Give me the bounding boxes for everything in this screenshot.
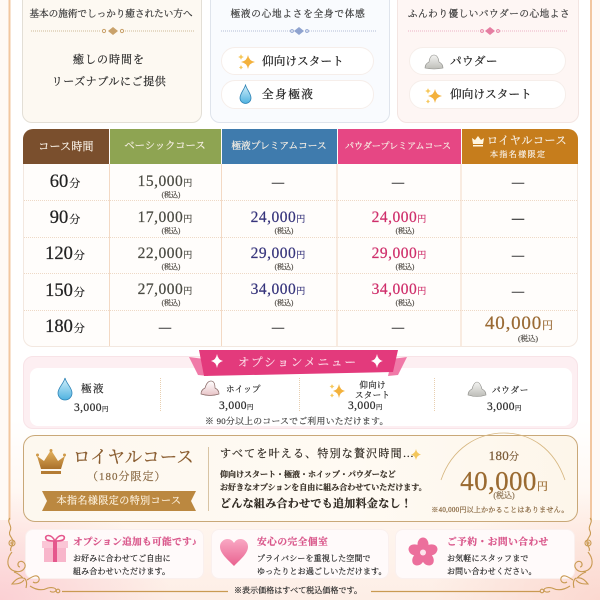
price: 34,000: 34,000円 <box>251 281 305 298</box>
ribbon: option menu heading <box>189 350 407 376</box>
description: お好みに合わせてご自由に <box>73 554 171 563</box>
price: 34,000: 34,000円 <box>372 281 426 298</box>
royal price block <box>430 447 576 517</box>
option name: パウダー <box>492 385 529 395</box>
royal highlight: どんな組み合わせでも追加料金なし！ <box>220 498 412 510</box>
tax note: (税込) <box>275 299 293 307</box>
royal price arc <box>430 428 580 498</box>
option price: 3,000円 <box>487 401 522 413</box>
tax note: (税込) <box>396 263 414 271</box>
option name <box>355 380 390 400</box>
panel: gokueki premium card <box>210 0 390 123</box>
tax note: (税込) <box>518 334 538 343</box>
table grid <box>24 164 577 346</box>
heading: オプション追加も可能です♪ <box>73 537 197 548</box>
icon: crown <box>36 449 66 477</box>
icon: water drop <box>58 378 72 400</box>
icon: sparkles <box>330 384 345 398</box>
row: 180 min: 180分 <box>45 317 85 337</box>
heading: 安心の完全個室 <box>257 537 328 548</box>
price: 40,000 royal: 40,000円 <box>485 313 553 334</box>
dash: — <box>512 175 524 189</box>
price: 22,000: 22,000円 <box>138 245 192 262</box>
panel: add options <box>25 529 204 579</box>
row: 60 min: 60分 <box>50 172 80 192</box>
header: powder premium <box>338 129 461 164</box>
ribbon label: オプションメニュー <box>238 357 358 369</box>
dash: — <box>159 320 171 334</box>
price: 29,000: 29,000円 <box>251 245 305 262</box>
royal title: ロイヤルコース <box>73 447 194 467</box>
panel: reservation <box>395 529 575 579</box>
pill label: 全身極液 <box>262 88 314 101</box>
tax note: (税込) <box>162 299 180 307</box>
pill label: パウダー <box>450 55 498 68</box>
header: powder premium: パウダープレミアムコース <box>345 141 451 151</box>
pill: face-up start <box>221 47 374 75</box>
icon: whip mound <box>200 380 220 396</box>
icon: crown <box>472 136 484 146</box>
tax note: (税込) <box>162 263 180 271</box>
ornament divider <box>221 27 376 35</box>
description: お問い合わせください。 <box>447 566 537 576</box>
option: face-up start <box>330 380 390 412</box>
row: 150 min: 150分 <box>45 281 85 301</box>
ornament divider <box>31 27 194 35</box>
inner white area <box>30 368 572 426</box>
option note: ※ 90分以上のコースでご利用いただけます。 <box>205 416 389 426</box>
option name: スタート <box>355 390 390 400</box>
royal title: ロイヤルコース <box>487 135 567 147</box>
ornament divider <box>408 27 567 35</box>
option name: ホイップ <box>226 384 261 394</box>
description: お気軽にスタッフまで <box>447 554 528 563</box>
duration: 180分 <box>489 448 519 463</box>
option price: 3,000円 <box>219 400 254 412</box>
dash: — <box>512 211 524 225</box>
pill: full body gokueki <box>221 80 374 109</box>
icon: sparkle <box>409 448 422 461</box>
option name: 仰向け <box>359 380 386 390</box>
option name: 極液 <box>81 384 105 395</box>
price: 24,000: 24,000円 <box>372 209 426 226</box>
option: whip <box>200 380 261 412</box>
icon: cherry blossom <box>408 537 438 568</box>
price: 15,000: 15,000円 <box>138 173 192 190</box>
footer note: ※表示価格はすべて税込価格です。 <box>234 586 362 595</box>
tax note: (税込) <box>162 191 180 199</box>
row: 90 min: 90分 <box>50 208 80 228</box>
tax note: (税込) <box>396 227 414 235</box>
icon: water drop <box>240 84 252 104</box>
icon: powder mound <box>424 54 444 70</box>
header: gokueki premium <box>222 129 337 164</box>
heading: ご予約・お問い合わせ <box>447 537 549 548</box>
description: プライバシーを重視した空間で <box>257 554 371 563</box>
header: basic course <box>110 129 221 164</box>
tax note: (税込) <box>162 227 180 235</box>
header: course time <box>23 129 109 164</box>
description <box>73 553 171 578</box>
panel: royal course <box>23 435 578 522</box>
gold corner flourishes and footer rules <box>0 510 600 600</box>
option: powder <box>468 382 529 413</box>
price cap note: ※40,000円以上かかることはありません。 <box>431 506 569 514</box>
option: gokueki <box>58 378 109 414</box>
royal description: 仰向けスタート・極液・ホイップ・パウダーなど <box>220 470 396 479</box>
pill: face-up start <box>409 80 566 109</box>
tax note: (税込) <box>275 263 293 271</box>
header: course time: コース時間 <box>38 141 94 153</box>
icon: sparkles <box>238 54 255 70</box>
tax note: (税込) <box>493 491 515 500</box>
dash: — <box>392 175 404 189</box>
price: 29,000: 29,000円 <box>372 245 426 262</box>
royal description <box>220 468 427 494</box>
dash: — <box>392 320 404 334</box>
description: 組み合わせいただけます。 <box>73 566 170 576</box>
row: 120 min: 120分 <box>45 244 85 264</box>
dash: — <box>272 175 284 189</box>
description <box>257 553 387 578</box>
panel: basic course card <box>22 0 202 123</box>
price table <box>23 129 578 347</box>
card text: 癒しの時間を <box>73 54 145 66</box>
panel: option menu <box>23 356 578 429</box>
card heading: 極液の心地よさを全身で体感 <box>230 9 366 20</box>
royal limit: （180分限定） <box>87 471 166 483</box>
header: gokueki premium: 極液プレミアムコース <box>231 141 327 152</box>
card text line 2: リーズナブルにご提供 <box>52 76 166 88</box>
tax note: (税込) <box>275 227 293 235</box>
card heading: 基本の施術でしっかり癒されたい方へ <box>29 9 193 20</box>
icon: gift box <box>42 534 68 564</box>
dash: — <box>272 320 284 334</box>
ribbon text: 本指名様限定の特別コース <box>57 496 181 507</box>
price: 40,000円 <box>460 466 548 496</box>
dash: — <box>512 248 524 262</box>
ribbon: exclusive course <box>42 491 196 511</box>
pill: powder <box>409 47 566 75</box>
price: 17,000: 17,000円 <box>138 209 192 226</box>
pill label: 仰向けスタート <box>450 88 532 101</box>
header: royal course <box>462 129 578 164</box>
price: 27,000: 27,000円 <box>138 281 192 298</box>
tax note: (税込) <box>396 299 414 307</box>
description: ゆったりとお過ごしいただけます。 <box>257 566 387 576</box>
panel: powder premium card <box>397 0 579 123</box>
price: 24,000: 24,000円 <box>251 209 305 226</box>
option dividers <box>160 378 435 411</box>
option price: 3,000円 <box>348 400 383 412</box>
header: basic course: ベーシックコース <box>124 141 206 152</box>
panel: private room <box>211 529 389 579</box>
royal headline: すべてを叶える、特別な贅沢時間… <box>220 448 415 460</box>
royal subtitle: 本指名様限定 <box>490 150 546 159</box>
card heading: ふんわり優しいパウダーの心地よさ <box>408 9 570 20</box>
option price: 3,000円 <box>74 402 109 414</box>
icon: powder mound <box>468 382 486 397</box>
icon: sparkles <box>425 88 442 104</box>
vertical divider <box>208 447 209 511</box>
pill label: 仰向けスタート <box>262 55 344 68</box>
icon: heart <box>219 538 249 567</box>
royal description: お好きなオプションを自由に組み合わせていただけます。 <box>220 483 427 492</box>
description <box>447 553 537 578</box>
dash: — <box>512 284 524 298</box>
